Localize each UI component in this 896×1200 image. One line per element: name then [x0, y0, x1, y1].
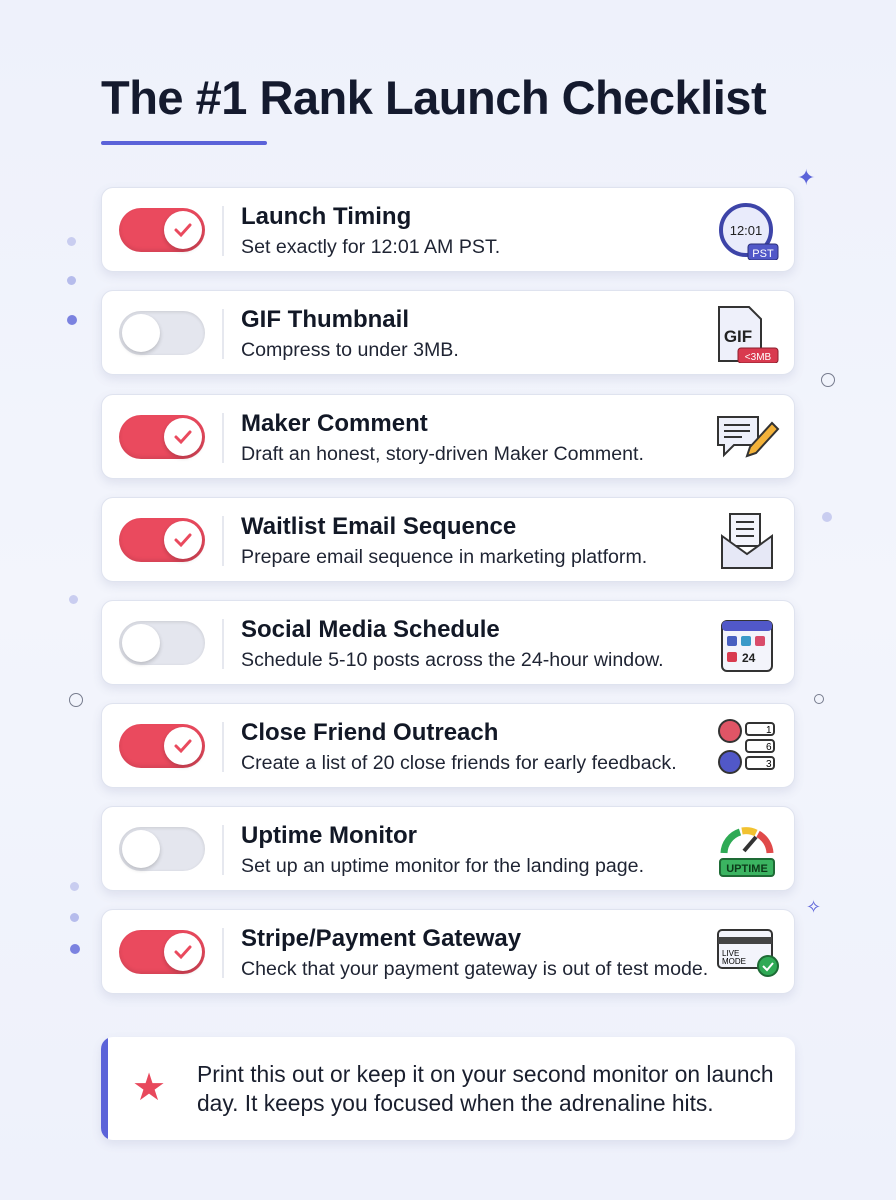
- card: uptime: Set up an uptime monitor for the landing page.: [241, 855, 644, 877]
- card: outreach: [101, 703, 795, 788]
- card: gif: [101, 290, 795, 375]
- icon: calendar: [721, 620, 773, 672]
- card: gif: Compress to under 3MB.: [241, 339, 459, 361]
- card: uptime: Uptime Monitor: [241, 822, 417, 849]
- card: maker comment: [101, 394, 795, 479]
- footer callout: day. It keeps you focused when the adrenaline hits.: [197, 1090, 714, 1116]
- icon: gif file: <3MB: [745, 352, 772, 363]
- title: The #1 Rank Launch Checklist: [101, 71, 766, 124]
- card: launch timing: Set exactly for 12:01 AM PST.: [241, 236, 500, 258]
- card: waitlist: [101, 497, 795, 582]
- card: stripe: Stripe/Payment Gateway: [241, 925, 521, 952]
- icon: friends list: 6: [766, 742, 772, 753]
- icon: friends list: 1: [766, 725, 772, 736]
- card: maker comment: Maker Comment: [241, 410, 428, 437]
- card: social: Schedule 5-10 posts across the 24-hour window.: [241, 649, 664, 671]
- card: maker comment: Draft an honest, story-driven Maker Comment.: [241, 443, 644, 465]
- card: launch timing: Launch Timing: [241, 203, 411, 230]
- card: waitlist: Waitlist Email Sequence: [241, 513, 516, 540]
- card: social: [101, 600, 795, 685]
- icon: calendar: 24: [742, 651, 756, 665]
- card: gif: GIF Thumbnail: [241, 306, 409, 333]
- card: waitlist: Prepare email sequence in marketing platform.: [241, 546, 647, 568]
- icon: friends list: [718, 719, 775, 774]
- card: uptime: [101, 806, 795, 891]
- icon: gif file: [718, 306, 778, 363]
- text: ✦: [797, 165, 815, 190]
- card: social: Social Media Schedule: [241, 616, 500, 643]
- icon: card live: [717, 929, 779, 977]
- footer callout: Print this out or keep it on your second monitor on launch: [197, 1061, 774, 1087]
- card: outreach: Create a list of 20 close friends for early feedback.: [241, 752, 677, 774]
- decorative dots: [67, 237, 76, 246]
- icon: clock: [719, 203, 778, 260]
- icon: clock: PST: [752, 248, 774, 260]
- card: stripe: [101, 909, 795, 994]
- text: ✧: [806, 897, 821, 917]
- icon: friends list: 3: [766, 759, 772, 770]
- card: outreach: Close Friend Outreach: [241, 719, 498, 746]
- icon: comment pencil: [717, 416, 780, 458]
- card: stripe: Check that your payment gateway is out of test mode.: [241, 958, 708, 980]
- footer callout: [101, 1037, 795, 1140]
- card: launch timing: [101, 187, 795, 272]
- icon: clock: 12:01: [730, 223, 762, 238]
- icon: envelope: [721, 513, 773, 569]
- icon: card live: LIVE: [722, 949, 739, 958]
- icon: star: ★: [132, 1067, 166, 1109]
- icon: gauge: UPTIME: [726, 863, 768, 875]
- icon: gif file: GIF: [724, 327, 752, 346]
- icon: gauge: [719, 827, 775, 877]
- icon: card live: MODE: [722, 957, 746, 966]
